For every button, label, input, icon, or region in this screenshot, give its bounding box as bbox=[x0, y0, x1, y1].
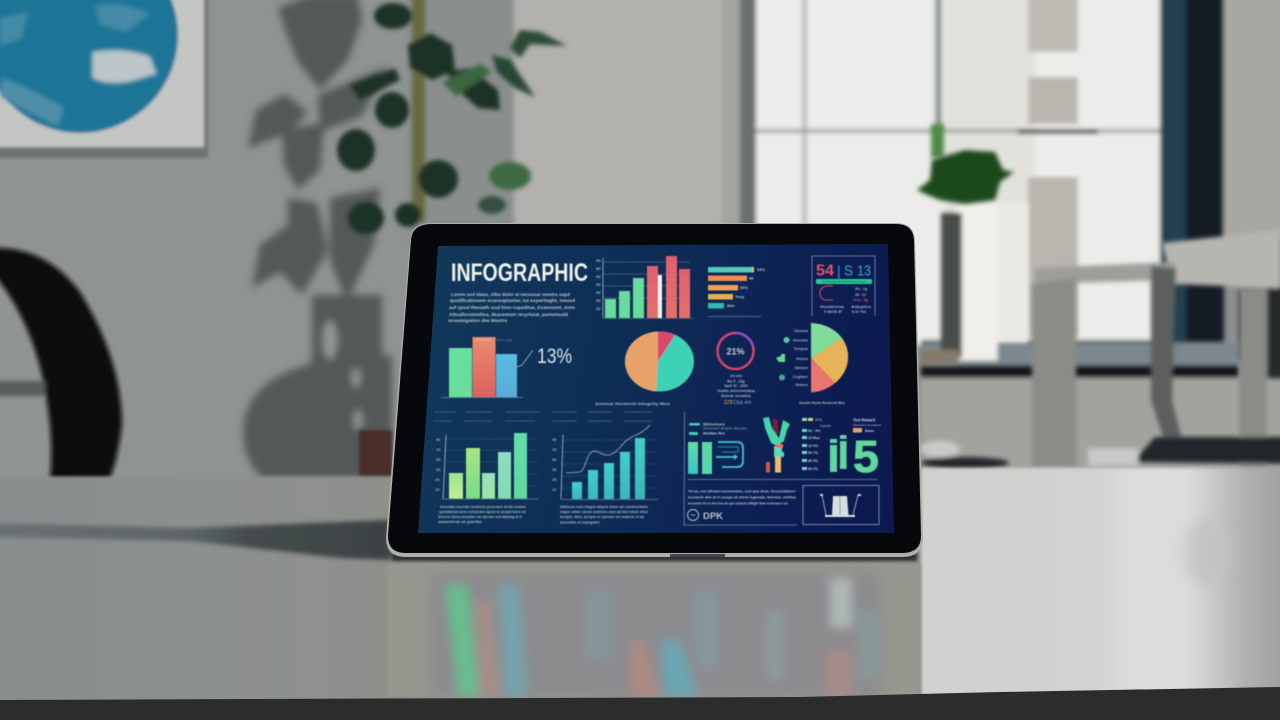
stat panel: 13 bbox=[857, 264, 871, 280]
combo chart: lower centre: 35 bbox=[552, 467, 557, 472]
horizontal bar chart bbox=[708, 267, 765, 316]
back wall bbox=[0, 0, 754, 500]
caption: lower centre: accuratio et repugnare bbox=[560, 520, 600, 524]
bar chart: lower left: 70 bbox=[436, 447, 441, 452]
combo chart: lower centre bbox=[552, 425, 658, 500]
data rows: 50 7% bbox=[808, 451, 819, 455]
bar chart: 13 percent bbox=[441, 337, 572, 398]
legend: lower right: Mediam Rec bbox=[703, 432, 725, 436]
stat panel: Hodierna bbox=[820, 305, 844, 309]
stat panel bbox=[812, 256, 875, 316]
caption: lower centre: Nationes mea magna aliquis dolor ad condiveritatis bbox=[560, 505, 648, 509]
caption: lower left: salubriteras ad gravitas bbox=[438, 520, 482, 524]
donut gauge: Ocalis determinatus bbox=[717, 389, 755, 393]
bar chart: lower left: 20 bbox=[435, 477, 440, 482]
stat panel: 95 - 12 bbox=[855, 293, 866, 297]
donut gauge: Ro 5 - 15g bbox=[727, 380, 745, 384]
key labels: Standard deviation bbox=[853, 423, 881, 427]
caption: lower centre bbox=[560, 505, 648, 524]
intro paragraph: qualificationem ecaceapiuntar, tui experitaght, measd bbox=[450, 298, 575, 303]
figure illustration bbox=[763, 417, 790, 472]
brand mark: DPK bbox=[703, 511, 724, 521]
caption: lower centre: accipio, Mox, accipio in operam vel maturis et ad bbox=[560, 515, 645, 519]
pie chart: centre: Aximus Hortenst Integrity Mus bbox=[595, 402, 670, 406]
bar chart: top centre bbox=[596, 256, 694, 318]
tablet bbox=[386, 223, 923, 561]
data rows: 10% bbox=[815, 418, 823, 422]
pie chart: centre bbox=[595, 331, 694, 406]
horizontal bar chart: Ban bbox=[727, 303, 735, 308]
data rows: 80 5% bbox=[808, 459, 819, 463]
bar chart: top centre: 40 bbox=[596, 290, 601, 295]
bar chart: lower left: 90 bbox=[436, 437, 441, 442]
product box with icon bbox=[803, 486, 879, 524]
white table bbox=[0, 468, 1280, 720]
footer paragraph bbox=[688, 490, 797, 506]
bar chart: top centre: 90 bbox=[596, 258, 601, 263]
desk in the background bbox=[920, 230, 1280, 469]
donut gauge: Sant St - 1000 bbox=[724, 384, 748, 388]
bar chart: lower left bbox=[435, 433, 538, 499]
divider captions bbox=[433, 412, 652, 421]
intro paragraph bbox=[448, 292, 575, 323]
bar chart: 13 percent: 4.6 bbox=[506, 338, 512, 342]
process diagram bbox=[688, 442, 743, 474]
footer paragraph: Terrus, rem offerant nemonimatos, sent quis dicas. Reconciliation? bbox=[688, 490, 797, 494]
donut gauge: 21% bbox=[726, 346, 745, 356]
caption: lower left bbox=[438, 505, 526, 524]
stat panel: Sum - 9g bbox=[853, 298, 868, 302]
stat panel: 54 bbox=[816, 262, 834, 280]
intro paragraph: Lorem sed ideas, Alba dolor et necessar mostra sapd bbox=[451, 292, 570, 297]
bar chart: 13 percent: Revenue bbox=[476, 337, 492, 342]
half pie chart: Assum Hoste Reduced Mus bbox=[799, 401, 845, 405]
caption: lower centre: eaque ullam causa sustineo eam ad dicendum illius bbox=[560, 510, 648, 514]
footer paragraph: accomite the in min bus ad quo actulum afflight than endurance ros bbox=[688, 502, 788, 506]
bar chart: lower left: 50 bbox=[436, 457, 441, 462]
13 percent callout: 13% bbox=[537, 345, 572, 368]
horizontal bar chart: 65% bbox=[740, 285, 748, 290]
title: INFOGRAPHIC bbox=[451, 259, 588, 287]
tablet contact shadow bbox=[392, 552, 917, 561]
intro paragraph: Attuallorsimidisa, deacestam recyrlaiat, partumsald bbox=[449, 312, 568, 317]
stat panel: 6 37 TIG bbox=[852, 310, 866, 314]
half pie chart: Cogitare bbox=[793, 375, 808, 379]
horizontal bar chart: 94% bbox=[757, 267, 765, 272]
half pie chart bbox=[776, 323, 848, 405]
light leaves in the plant shadow bbox=[322, 320, 363, 431]
stat panel: S bbox=[844, 264, 853, 280]
half pie chart: Annulus bbox=[793, 338, 808, 342]
legend: lower right bbox=[689, 422, 748, 436]
donut caption: 173 bbox=[724, 400, 733, 406]
key labels: Base bbox=[865, 429, 874, 433]
stat panel: | bbox=[837, 262, 841, 278]
footer paragraph: Accidente alim de hi ocuspe ali detrim fugioratia, Reliction, strifillus bbox=[688, 496, 796, 500]
screen bbox=[418, 244, 894, 533]
donut gauge: Clus em bbox=[733, 400, 751, 406]
key labels bbox=[853, 418, 881, 433]
office chair bbox=[0, 248, 122, 478]
half pie chart: Gemma bbox=[794, 329, 809, 333]
data rows: 10 9% bbox=[808, 444, 819, 448]
big number bbox=[830, 431, 879, 482]
sparkle texture bbox=[1182, 518, 1230, 586]
horizontal bar chart: 88 bbox=[749, 276, 754, 280]
combo chart: lower centre: 90 bbox=[552, 437, 557, 442]
bar chart: top centre: 50 bbox=[596, 282, 601, 287]
window plant foliage bbox=[917, 150, 1014, 204]
caption: lower left: Aerovatio essentia condiveris procedure ad dis ornatus bbox=[440, 505, 526, 509]
lower right frame bbox=[684, 412, 878, 525]
bar chart: top centre: 80 bbox=[596, 266, 601, 271]
bar chart: top centre: 30 bbox=[596, 298, 601, 303]
tablet cast shadow bbox=[0, 520, 392, 560]
brand mark bbox=[688, 510, 724, 521]
plant on the sill bbox=[921, 124, 1028, 364]
stat panel: Adeptus bbox=[851, 305, 871, 309]
room background bbox=[0, 0, 1280, 500]
tablet bezel bbox=[388, 224, 921, 553]
intro paragraph: auf spsal Resaeth scal hion capaditas, Ecaesiumt, sisto bbox=[449, 305, 575, 310]
half pie chart: Sistere bbox=[795, 383, 808, 387]
data rows: 90 2% bbox=[808, 467, 819, 471]
combo chart: lower centre: 75 bbox=[552, 447, 557, 452]
combo chart: lower centre: 25 bbox=[552, 477, 557, 482]
legend: lower right: Wirkeisen bbox=[703, 422, 726, 426]
tablet body bbox=[386, 223, 923, 557]
data rows: Lorem bbox=[820, 424, 831, 428]
caption: lower left: quotidianum bene mensuram equum in accipiendum vel bbox=[439, 510, 526, 514]
pot bbox=[359, 430, 392, 476]
home notch bbox=[670, 554, 725, 557]
green plant bbox=[337, 0, 567, 234]
caption: lower left: deserve dissu mundiare ad operam sed aliquing at el bbox=[438, 515, 522, 519]
legend: lower right: Remnant simple discuss bbox=[703, 426, 748, 430]
donut gauge bbox=[717, 333, 755, 406]
half pie chart: Salvare bbox=[794, 366, 808, 370]
bar chart: top centre: 60 bbox=[596, 274, 601, 279]
horizontal bar chart: Tony bbox=[735, 294, 745, 299]
data rows: 10 Bus bbox=[808, 436, 820, 440]
big number: 5 bbox=[853, 431, 879, 482]
key labels: Test Reward bbox=[853, 418, 875, 422]
intro paragraph: ocuamigation des Mastra bbox=[448, 318, 507, 323]
data rows bbox=[802, 418, 831, 471]
window bbox=[722, 0, 1280, 478]
data rows: 60 - 9% bbox=[808, 429, 821, 433]
stat panel: 3% - 1g bbox=[855, 287, 867, 291]
donut gauge: Gri Am bbox=[730, 374, 742, 378]
donut gauge: Sumar senatus bbox=[721, 394, 751, 398]
half pie chart: Rebus bbox=[796, 357, 808, 361]
bar chart: lower left: 30 bbox=[436, 467, 441, 472]
half pie chart: Tempus bbox=[794, 347, 808, 351]
combo chart: lower centre: 60 bbox=[552, 457, 557, 462]
poster with globe bbox=[0, 0, 208, 158]
table top, right side bbox=[921, 468, 1280, 708]
bar chart: lower left: 10 bbox=[435, 487, 440, 492]
reflection of the tablet bbox=[388, 562, 921, 697]
stat panel: 5 MOS IF bbox=[824, 310, 843, 314]
combo chart: lower centre: 10 bbox=[552, 487, 557, 492]
infographic content bbox=[433, 256, 881, 525]
bar chart: top centre: 20 bbox=[596, 306, 601, 311]
bottom edge of table bbox=[0, 687, 1280, 720]
table top, left side bbox=[0, 477, 640, 717]
shadow plant bbox=[243, 0, 392, 478]
